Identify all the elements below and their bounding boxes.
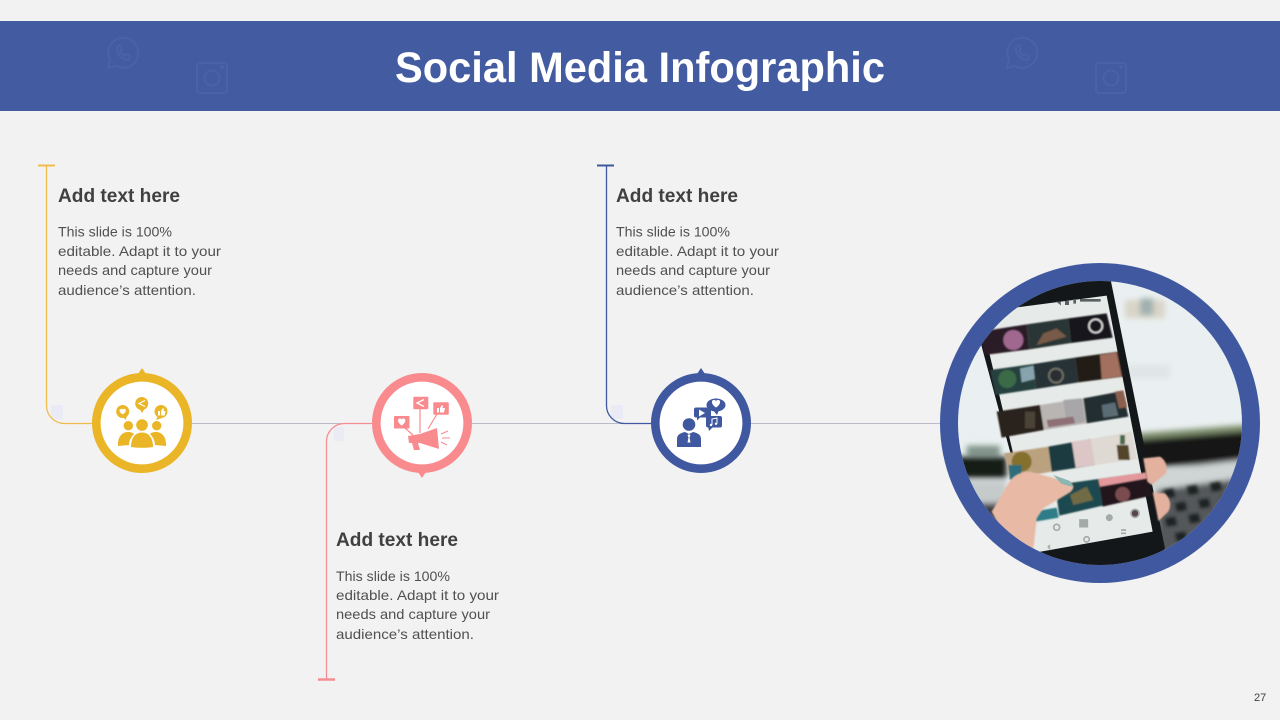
body text: editable. Adapt it to your: [58, 243, 221, 259]
body text: This slide is 100%: [616, 224, 730, 240]
body text: needs and capture your: [58, 262, 212, 278]
header banner: [0, 21, 1280, 111]
icon badge: pink megaphone: [376, 377, 468, 478]
text block: first: [58, 186, 221, 298]
nav icons: [1048, 509, 1139, 549]
body text: This slide is 100%: [336, 568, 450, 584]
icon: faint whatsapp left: [108, 38, 138, 68]
icon: faint instagram right: [1096, 63, 1126, 93]
body text: needs and capture your: [616, 262, 770, 278]
text block: third: [616, 186, 779, 298]
text block: second: [336, 530, 499, 642]
icon: megaphone with reaction bubbles: [394, 397, 450, 450]
body text: audience’s attention.: [336, 626, 474, 642]
photo background: [958, 281, 1242, 565]
body text: [616, 224, 779, 298]
photo circle: hand holding phone: [940, 263, 1260, 583]
title: Social Media Infographic: [395, 44, 885, 92]
body text: editable. Adapt it to your: [336, 587, 499, 603]
status icons: [1056, 299, 1101, 305]
phone screen: [985, 296, 1153, 552]
body text: audience’s attention.: [616, 282, 754, 298]
photo grid: [980, 313, 1152, 522]
page number: 27: [1254, 692, 1266, 704]
body text: editable. Adapt it to your: [616, 243, 779, 259]
heading: Add text here: [336, 530, 458, 551]
body text: audience’s attention.: [58, 282, 196, 298]
thumbnail nail: [1053, 475, 1073, 487]
keyboard: [1163, 482, 1232, 542]
connector: blue: [597, 166, 652, 424]
connector: pink: [318, 424, 373, 680]
heading: Add text here: [616, 186, 738, 207]
icon: person with media bubbles: [677, 398, 726, 447]
heading: Add text here: [58, 186, 180, 207]
body text: needs and capture your: [336, 606, 490, 622]
fingers: [1143, 457, 1167, 485]
icon: faint instagram left: [197, 63, 227, 93]
body text: [58, 224, 221, 298]
timeline grey connector: [192, 422, 942, 424]
thumb: [992, 472, 1073, 550]
icon badge: yellow people: [96, 368, 188, 469]
phone body: [981, 281, 1165, 565]
connector: yellow: [38, 166, 93, 424]
body text: [336, 568, 499, 642]
icon: group with reaction bubbles: [116, 397, 168, 448]
icon badge: blue person: [655, 368, 747, 469]
icon: faint whatsapp right: [1007, 38, 1037, 68]
body text: This slide is 100%: [58, 224, 172, 240]
